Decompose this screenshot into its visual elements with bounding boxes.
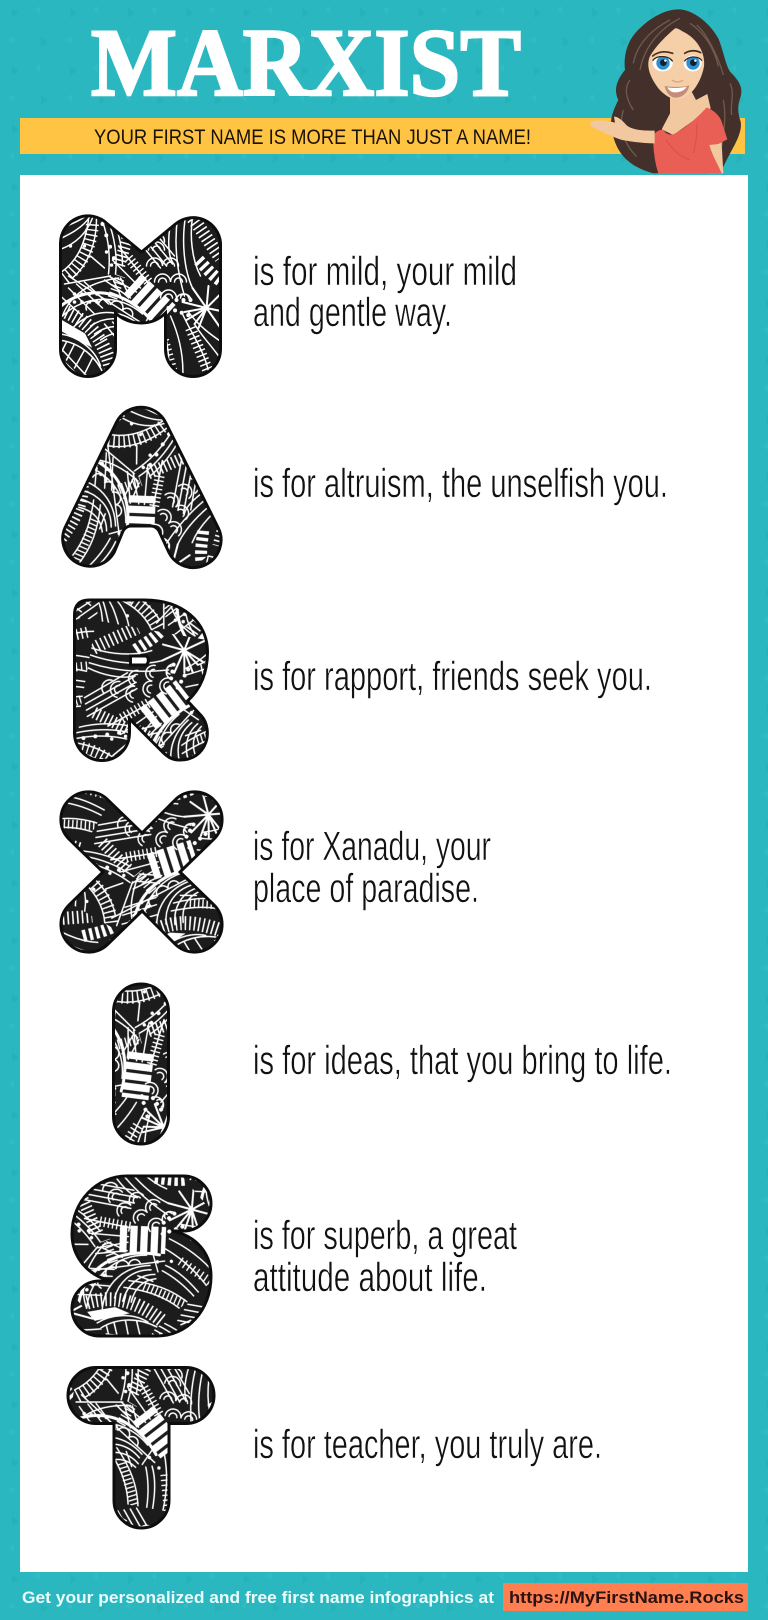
eyebrows <box>653 51 701 56</box>
mouth <box>665 85 689 98</box>
text: X second line: place of paradise. <box>253 865 479 911</box>
text: M second line: and gentle way. <box>253 289 452 335</box>
banner text: YOUR FIRST NAME IS MORE THAN JUST A NAME! <box>94 125 531 149</box>
title: MARXIST <box>91 9 521 116</box>
nose <box>672 80 683 82</box>
eyes <box>653 55 673 71</box>
hand and forearm <box>590 117 655 143</box>
icon: zentangle letter M <box>60 216 220 376</box>
footer url badge: https://MyFirstName.Rocks <box>509 1588 744 1607</box>
neck and chest <box>662 92 711 135</box>
face <box>648 28 704 99</box>
text: M first line: is for mild, your mild <box>253 248 517 294</box>
shirt <box>653 107 727 173</box>
text: S first line: is for superb, a great <box>253 1212 517 1258</box>
icon: zentangle letter R <box>74 600 208 760</box>
text: S second line: attitude about life. <box>253 1254 487 1300</box>
banner <box>20 118 745 154</box>
icon: zentangle letter X <box>61 792 222 952</box>
footer url badge <box>503 1583 748 1611</box>
icon: zentangle letter S <box>72 1176 211 1336</box>
footer call to action: Get your personalized and free first name infographics at <box>22 1588 494 1607</box>
illustration: smiling woman presenting <box>590 9 741 173</box>
icon: zentangle letter T <box>68 1368 214 1528</box>
icon: zentangle letter A <box>63 407 221 568</box>
icon: zentangle letter I <box>114 984 168 1144</box>
text: T line: is for teacher, you truly are. <box>253 1421 602 1467</box>
arm at right <box>705 137 723 173</box>
text: X first line: is for Xanadu, your <box>253 823 491 869</box>
